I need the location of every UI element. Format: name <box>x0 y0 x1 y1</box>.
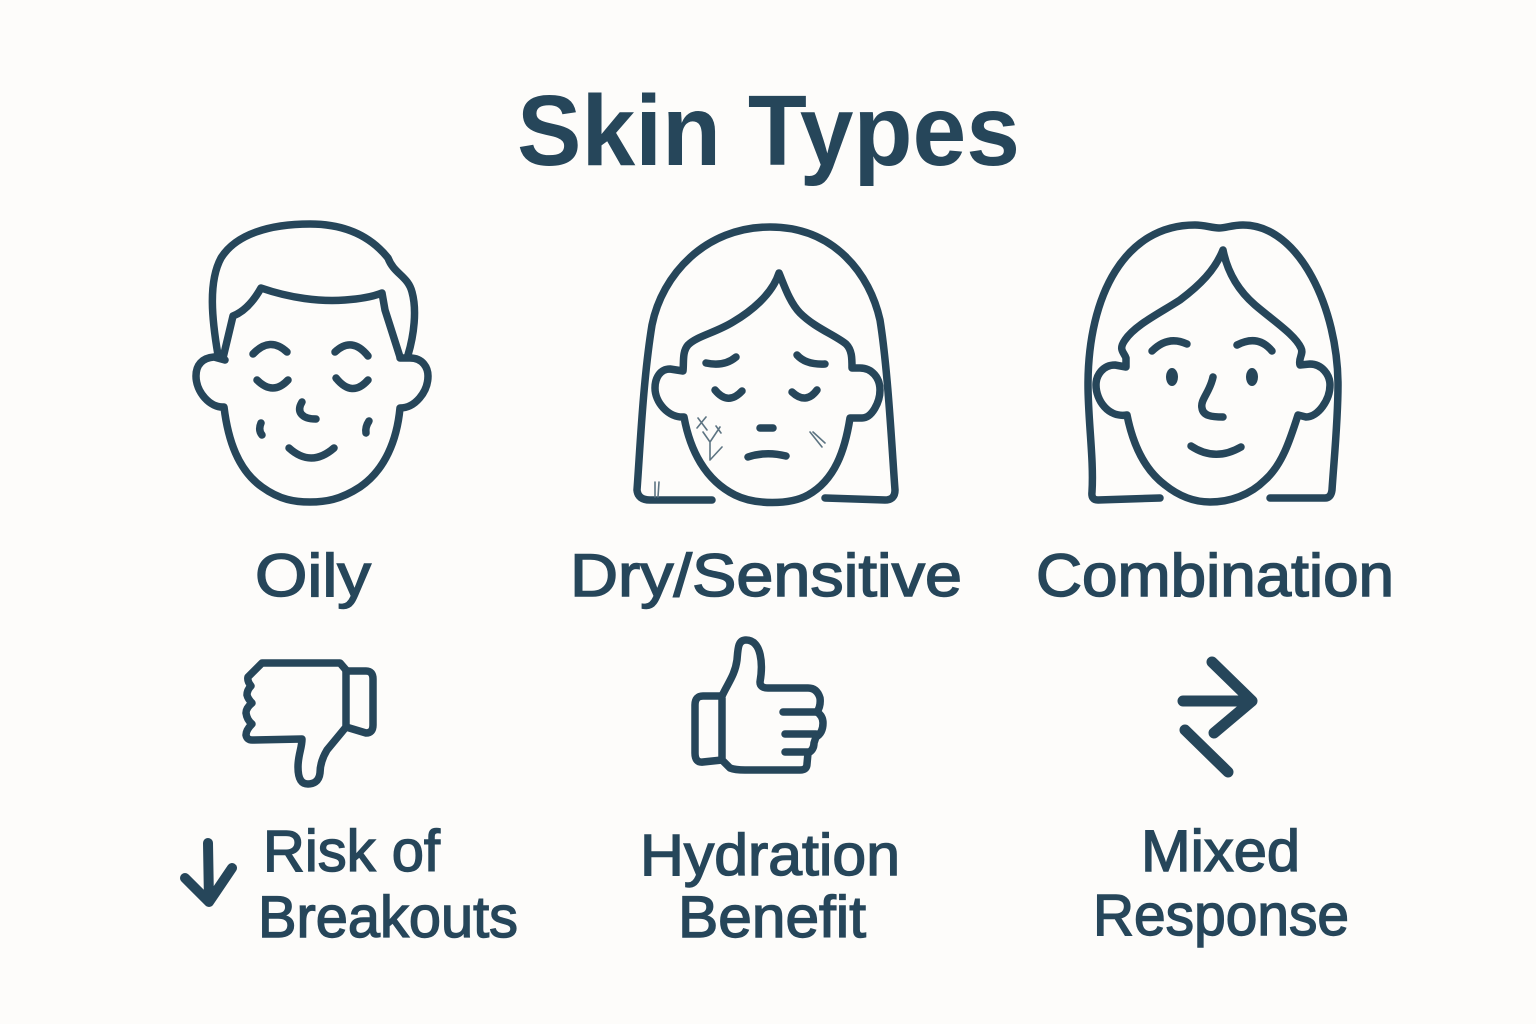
label: Mixed Response: Mixed <box>1141 819 1300 884</box>
label: Mixed Response <box>1093 819 1349 948</box>
panel: combination <box>1036 225 1394 609</box>
panel: dry/sensitive <box>570 227 962 609</box>
label: Hydration Benefit: Hydration <box>640 823 900 888</box>
icon: mixed arrows <box>1183 662 1252 772</box>
panel: oily <box>196 224 428 609</box>
icon: down arrow <box>185 843 232 902</box>
icon: thumbs up <box>695 640 823 770</box>
panel: risk of breakouts <box>185 663 518 950</box>
label: Oily: Oily <box>255 542 371 609</box>
label: Dry/Sensitive: Dry/Sensitive <box>570 542 962 609</box>
label: Risk of Breakouts: Breakouts <box>258 885 518 950</box>
icon: man's face with oily skin <box>196 224 428 502</box>
label: Combination: Combination <box>1036 542 1394 609</box>
icon: woman's face with dry skin <box>637 227 895 502</box>
label: Hydration Benefit: Benefit <box>678 885 866 950</box>
label: Hydration Benefit <box>640 823 900 950</box>
panel: mixed response <box>1093 662 1349 948</box>
title: Skin Types <box>517 75 1020 187</box>
panel: hydration benefit <box>640 640 900 950</box>
label: Risk of Breakouts <box>258 819 518 950</box>
label: Mixed Response: Response <box>1093 883 1349 948</box>
icon: thumbs down <box>246 663 373 784</box>
label: Risk of Breakouts: Risk of <box>263 819 441 884</box>
icon: woman's face with combination skin <box>1088 225 1338 502</box>
